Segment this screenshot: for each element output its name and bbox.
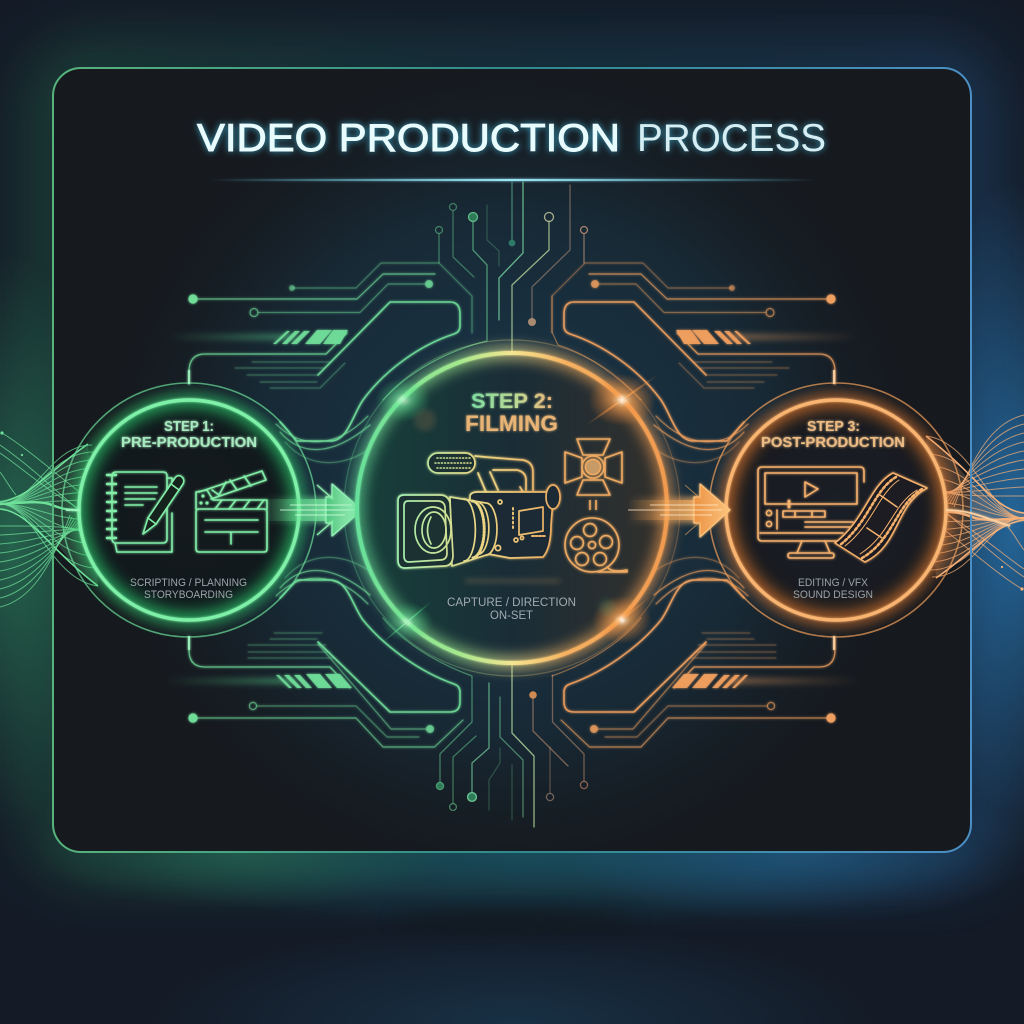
icon: film strip bbox=[835, 473, 927, 562]
step 3 heading bbox=[761, 419, 905, 451]
microphone and handle bbox=[428, 453, 475, 473]
icon: clapperboard bbox=[196, 471, 267, 552]
arrow: step 1 to step 2 bbox=[262, 484, 362, 536]
panel border bbox=[53, 68, 971, 852]
icon: notebook and pencil bbox=[107, 471, 267, 552]
streak bands bbox=[165, 334, 859, 684]
lens flares bbox=[375, 373, 659, 646]
step 2 heading: STEP 2: bbox=[471, 390, 553, 413]
lens barrel bbox=[450, 497, 497, 566]
circuit traces: centre top bbox=[383, 182, 641, 400]
title divider bbox=[210, 179, 815, 181]
floor shadow bbox=[395, 912, 635, 928]
arrow: step 2 to step 3 bbox=[628, 484, 730, 537]
step 3 caption: SOUND DESIGN bbox=[793, 589, 873, 601]
icon: film reel bbox=[565, 518, 627, 572]
step 3 heading: STEP 3: bbox=[807, 419, 860, 435]
camera body bbox=[470, 492, 553, 558]
caption divider bbox=[465, 580, 560, 582]
step 1 heading: STEP 1: bbox=[164, 419, 214, 435]
step 2 heading bbox=[465, 390, 558, 436]
step 2 caption: CAPTURE / DIRECTION bbox=[447, 597, 576, 609]
step 1 heading: PRE-PRODUCTION bbox=[121, 435, 257, 451]
circuit traces: orange right bbox=[552, 263, 836, 747]
title bbox=[197, 117, 826, 160]
step 3 heading: POST-PRODUCTION bbox=[761, 435, 905, 451]
step 1 heading bbox=[121, 419, 257, 451]
panel: step 3 circle bbox=[709, 370, 1010, 650]
step 2 caption bbox=[447, 597, 576, 622]
step 3 caption bbox=[793, 577, 873, 601]
icon: video camera bbox=[398, 453, 560, 568]
panel: step 2 circle bbox=[357, 353, 667, 663]
step 3 caption: EDITING / VFX bbox=[798, 577, 869, 589]
step 2 caption: ON-SET bbox=[490, 610, 533, 622]
circuit traces: green left bbox=[188, 263, 472, 747]
step 2 outer ring bbox=[344, 340, 680, 676]
title: VIDEO PRODUCTION bbox=[197, 117, 620, 160]
title: PROCESS bbox=[637, 117, 826, 160]
step 1 caption: SCRIPTING / PLANNING bbox=[130, 577, 247, 589]
icon: stage light bbox=[565, 439, 622, 510]
step 1 caption: STORYBOARDING bbox=[144, 589, 233, 601]
matte box bbox=[398, 495, 453, 568]
panel: step 1 circle bbox=[62, 370, 316, 650]
main panel bbox=[53, 68, 971, 852]
icon: monitor with timeline bbox=[758, 467, 927, 562]
circuit traces: centre bottom bbox=[383, 618, 641, 827]
left wave bbox=[0, 431, 98, 607]
step 1 caption bbox=[130, 577, 247, 601]
right wave bbox=[926, 415, 1024, 591]
step 2 heading: FILMING bbox=[465, 411, 558, 436]
